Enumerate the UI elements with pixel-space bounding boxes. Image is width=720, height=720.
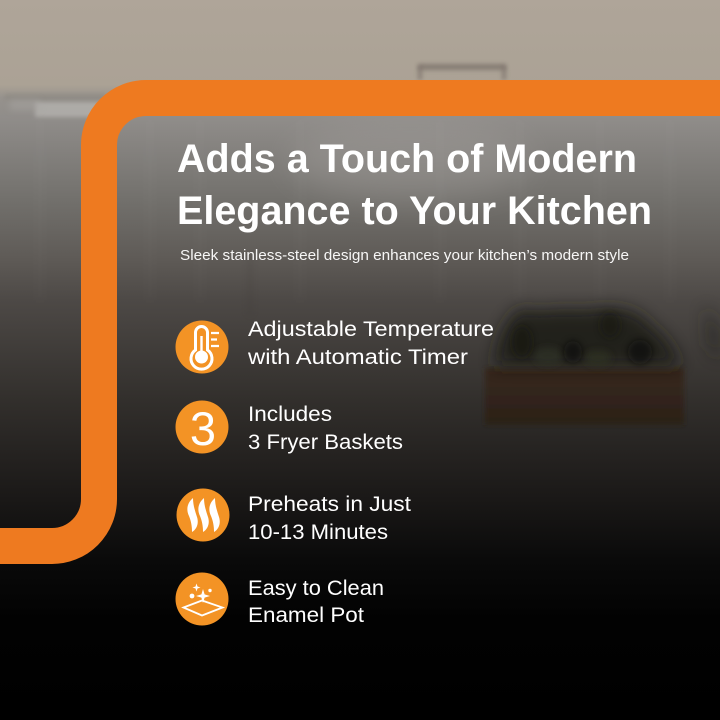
icon: number 3 <box>176 400 228 455</box>
orange frame band <box>0 98 720 546</box>
text: baskets <box>248 403 403 454</box>
icon: thermometer <box>176 320 228 374</box>
text: temperature: with Automatic Timer <box>247 346 468 369</box>
text: preheat: Preheats in Just <box>248 493 411 516</box>
subtitle: Sleek stainless-steel design enhances your kitchen’s modern style <box>180 247 629 264</box>
title <box>177 137 652 233</box>
feature: baskets <box>176 400 403 455</box>
text: baskets: 3 Fryer Baskets <box>248 431 403 454</box>
feature: temperature <box>176 318 494 374</box>
title: Elegance to Your Kitchen <box>177 189 652 233</box>
text: cleaning: Easy to Clean <box>248 577 384 600</box>
text: temperature <box>247 318 494 369</box>
text: baskets: Includes <box>248 403 332 426</box>
text: preheat <box>248 493 411 544</box>
text: cleaning: Enamel Pot <box>248 604 364 627</box>
feature: cleaning <box>176 572 384 627</box>
feature: preheat <box>176 488 411 544</box>
text: preheat: 10-13 Minutes <box>248 521 388 544</box>
icon: sparkling surface <box>176 572 228 626</box>
text: temperature: Adjustable Temperature <box>248 318 494 341</box>
text: cleaning <box>248 577 384 627</box>
title: Adds a Touch of Modern <box>177 137 637 181</box>
icon: heat waves <box>176 488 230 542</box>
icon: number 3: 3 <box>190 402 216 455</box>
